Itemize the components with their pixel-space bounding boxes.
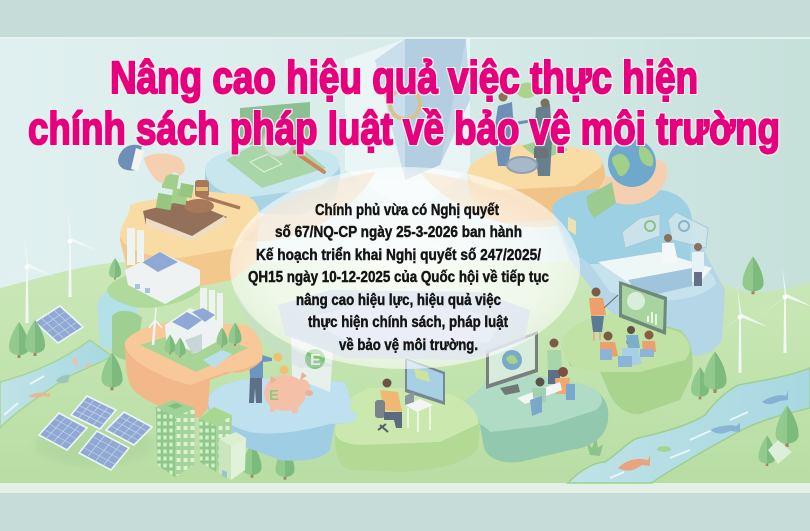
puzzle block: green desk block bbox=[335, 358, 480, 472]
icon tile sun bbox=[568, 217, 576, 235]
central crystal backdrop with emblem bbox=[345, 39, 470, 215]
green tower bbox=[156, 400, 195, 477]
book and gavel bbox=[143, 180, 240, 241]
handshake icon and money bbox=[515, 82, 568, 160]
puzzle block: teal analysis block bbox=[458, 331, 608, 462]
body text block: nâng cao hiệu lực, hiệu quả việc bbox=[296, 292, 501, 309]
waterfall block bbox=[97, 289, 142, 361]
puzzle block: blue savings block bbox=[208, 333, 357, 461]
body text block: thực hiện chính sách, pháp luật bbox=[308, 314, 508, 331]
teacher bbox=[589, 288, 618, 341]
man inserting coin bbox=[249, 344, 272, 403]
piggy bank: E bbox=[269, 387, 279, 404]
green blocks bbox=[156, 173, 194, 210]
ground bbox=[0, 262, 810, 483]
pale building bbox=[219, 432, 246, 480]
central translucent oval bbox=[230, 167, 580, 369]
lab team with dashboards bbox=[598, 212, 712, 298]
left river bbox=[0, 340, 112, 428]
wind turbines bbox=[0, 209, 810, 373]
body text block bbox=[248, 202, 549, 354]
hand with cuff bbox=[118, 145, 185, 184]
green tile and factory bbox=[140, 288, 248, 372]
team at desk bbox=[517, 338, 575, 416]
seated man bbox=[375, 378, 402, 432]
screen E: E bbox=[310, 352, 321, 369]
puzzle block: orange law block bbox=[118, 145, 259, 290]
audience bbox=[600, 326, 656, 367]
title bbox=[28, 52, 780, 154]
piggy bank bbox=[264, 372, 313, 413]
desk bbox=[405, 392, 433, 432]
analysis screen bbox=[486, 331, 538, 395]
solar panels, left bbox=[35, 306, 155, 470]
coins bbox=[274, 352, 288, 374]
puzzle block: orange factory block bbox=[125, 288, 262, 418]
world map screen bbox=[405, 358, 445, 405]
trees, ground bbox=[9, 256, 798, 480]
right river bbox=[568, 368, 810, 483]
puzzle block: blue right block bbox=[552, 189, 725, 356]
puzzle block: blue plan block bbox=[205, 102, 340, 215]
body text block: số 67/NQ-CP ngày 25-3-2026 ban hành bbox=[275, 224, 522, 241]
plan sheet and magnifier bbox=[226, 102, 326, 188]
mid green building bbox=[199, 407, 232, 472]
eco house on upper tile bbox=[107, 228, 200, 308]
globe in hand bbox=[587, 139, 667, 218]
presentation screen bbox=[619, 281, 667, 335]
body text block: QH15 ngày 10-12-2025 của Quốc hội về tiếp tục bbox=[248, 269, 549, 286]
puzzle block: light green classroom block bbox=[561, 281, 693, 414]
title: Nâng cao hiệu quả việc thực hiện bbox=[110, 52, 698, 103]
screen E bbox=[291, 333, 333, 392]
two business people bbox=[494, 92, 552, 176]
body text block: Chính phủ vừa có Nghị quyết bbox=[315, 202, 499, 219]
body text block: Kế hoạch triển khai Nghị quyết số 247/2025/ bbox=[256, 247, 542, 264]
gear bbox=[507, 157, 537, 173]
puzzle block: gold partnership block bbox=[468, 82, 605, 222]
river ripples and fish bbox=[4, 356, 788, 478]
body text block: về bảo vệ môi trường. bbox=[339, 337, 478, 354]
